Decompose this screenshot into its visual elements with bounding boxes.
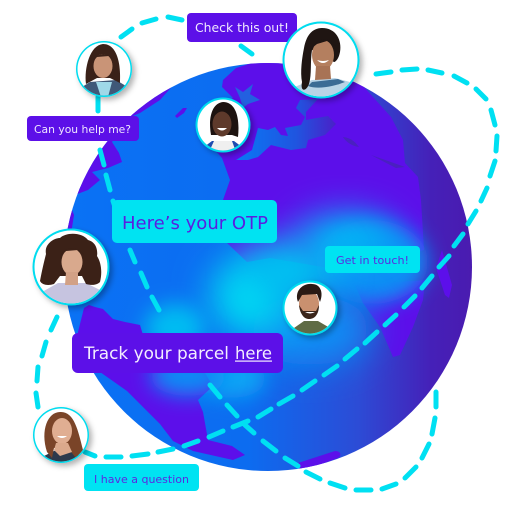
bubble: I have a question: [84, 464, 199, 491]
land: blue cross: [235, 84, 260, 108]
avatar: woman with auburn hair, lower left: [33, 407, 89, 466]
bubble: I have a question: I have a question: [94, 473, 189, 486]
land: south-west continent: [78, 305, 245, 460]
land: eastern sliver: [436, 250, 452, 298]
avatar: smiling woman, upper centre: [196, 98, 250, 156]
land: west rim strip: [68, 210, 74, 229]
bubble: Check this out!: Check this out!: [195, 21, 289, 35]
glow: blue and cyan centre: [145, 214, 428, 398]
glow: blue above the southern shore: [150, 356, 226, 396]
land: southern tip: [298, 451, 340, 469]
bubble: Can you help me?: [27, 116, 139, 141]
bubble: Here's your OTP: Here’s your OTP: [122, 213, 268, 234]
bubble: Get in touch!: [325, 246, 420, 273]
land: blue bay: [236, 99, 336, 160]
land: dark sea lane: [343, 137, 405, 168]
bubble: Track your parcel here: [72, 333, 283, 373]
bubble: Track your parcel here: Track your parcel: [83, 344, 229, 363]
bubble: Get in touch!: Get in touch!: [336, 254, 409, 267]
bubble: Check this out!: [187, 13, 297, 42]
globe: [60, 55, 476, 476]
avatar: man with long hair, top left: [76, 41, 132, 100]
island: [175, 108, 187, 118]
land: north-west continent: [78, 87, 172, 194]
bubble: Can you help me?: Can you help me?: [34, 124, 131, 136]
land: northern continent: [216, 63, 424, 266]
bubble: Here's your OTP: [112, 200, 277, 243]
avatar: woman with curly hair, left: [32, 228, 110, 306]
bubble: Track your parcel here: here: [235, 344, 272, 363]
avatar: bearded man, centre right: [282, 280, 338, 336]
avatar: woman with braid, top right: [282, 22, 360, 100]
land: south-east island: [355, 280, 425, 357]
